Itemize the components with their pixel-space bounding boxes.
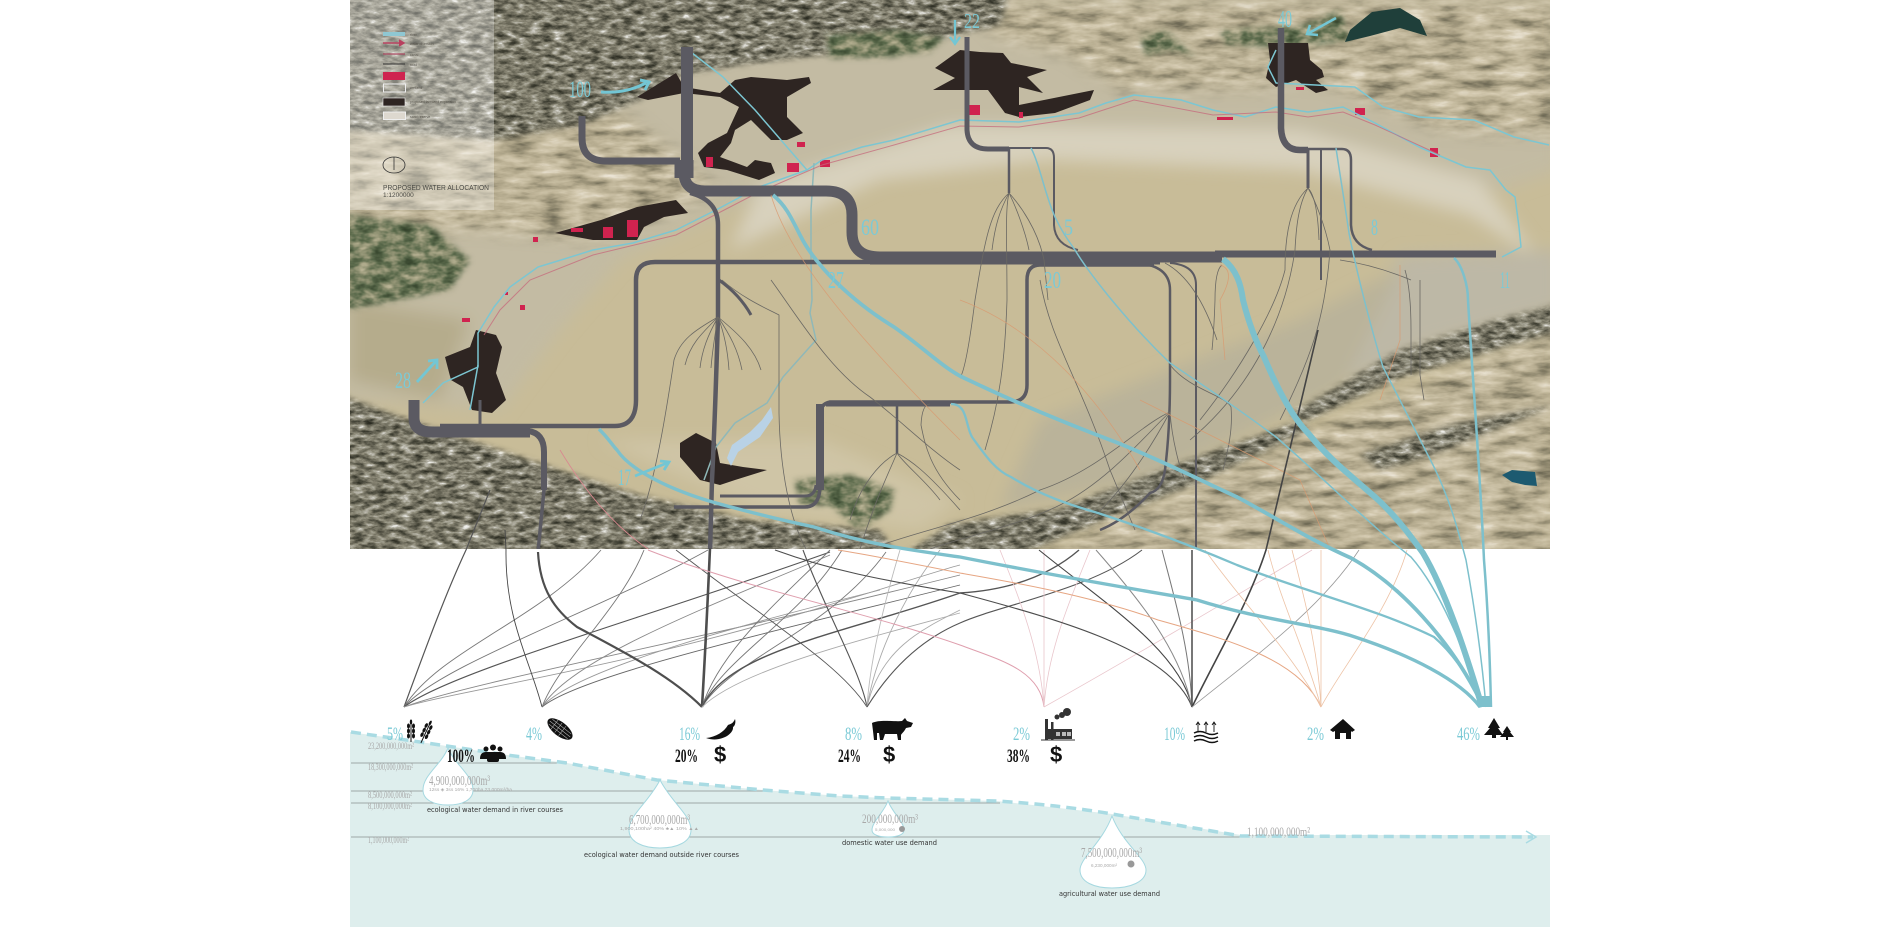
drop: domestic demand: [842, 801, 937, 847]
arrow: 100 inflow: [601, 80, 649, 92]
arrow: 40 inflow: [1307, 18, 1336, 35]
green vegetation patches: [350, 8, 1350, 530]
chili share: 16%: [679, 724, 700, 745]
chili income: [675, 742, 726, 767]
drop: outside river courses ecology: [584, 780, 739, 859]
drop: agricultural demand: 6,230,000m²: [1091, 863, 1118, 868]
orange canals: [771, 195, 1400, 549]
forest share: 46%: [1457, 724, 1480, 745]
arrow: water line end: [1526, 831, 1536, 843]
panel: satellite map: [340, 0, 1560, 552]
drop: river course ecology: ecological water demand in river courses: [427, 805, 563, 814]
inflow 40: 40: [1278, 7, 1292, 33]
canal fans: [640, 188, 1424, 549]
arrow: 28 inflow: [417, 360, 437, 382]
chili income: $: [714, 742, 726, 767]
level labels: 1,100,000,000m²: [1247, 824, 1310, 839]
dashed water line: [351, 732, 1533, 837]
level lines: [351, 763, 1241, 837]
allocation 20: 20: [1044, 268, 1061, 294]
drop: outside river courses ecology: ecological water demand outside river courses: [584, 850, 739, 859]
drop: river course ecology: [423, 748, 563, 814]
housing share: 2%: [1307, 724, 1324, 745]
inflow 100: 100: [569, 77, 591, 102]
inflow 28: 28: [395, 368, 411, 393]
drop: outside river courses ecology: 1,900,100ha² 40% ♣▲ 10% ▲▲: [620, 826, 699, 831]
terminal lake: [727, 407, 773, 466]
chili share: [679, 719, 735, 745]
drop: outside river courses ecology: 6,700,000,000m³: [629, 813, 690, 828]
arrow: 22 inflow: [950, 20, 960, 44]
drop: river course ecology: 4,900,000,000m³: [429, 774, 490, 789]
livestock share: [845, 718, 913, 745]
corn share: 4%: [526, 724, 542, 745]
rivers: [423, 50, 1549, 480]
tan ridged terrain: [350, 0, 1550, 549]
arrow: 17 inflow: [635, 461, 669, 476]
industry income: [1007, 742, 1062, 767]
legend labels: river: [410, 33, 418, 37]
water share: 10%: [1164, 724, 1185, 745]
river inflow labels and arrows: [395, 7, 1510, 490]
dark snow-capped mountains: [350, 0, 1550, 549]
legend swatches: [383, 32, 406, 120]
inflow 17: 17: [618, 465, 631, 490]
irrigation canals: [484, 100, 1440, 335]
drop: domestic demand: domestic water use demand: [842, 838, 937, 847]
sand desert base: [350, 0, 1550, 549]
flows to water conservation: [775, 330, 1359, 707]
level labels: [368, 742, 1310, 846]
allocation 27: 27: [828, 268, 844, 294]
drop: domestic demand: 200,000,000m³: [862, 811, 918, 826]
livestock income: 24%: [838, 746, 861, 767]
chili income: 20%: [675, 746, 698, 767]
flows to wheat: [404, 490, 960, 707]
industry income: 38%: [1007, 746, 1030, 767]
level labels: 8,100,000,000m²: [368, 802, 412, 812]
level labels: 23,200,000,000m²: [368, 742, 414, 752]
legend labels: [410, 33, 456, 119]
oasis farmland regions: [445, 43, 1328, 485]
forest share: [1457, 718, 1514, 745]
flows to corn: [505, 530, 960, 707]
north compass: [383, 157, 405, 173]
sector share row: [387, 708, 1514, 767]
livestock income: $: [883, 742, 895, 767]
flows to industry: [648, 550, 1312, 707]
level labels: 18,300,000,000m²: [368, 763, 413, 773]
pale northern foothills and river belt: [340, 0, 1560, 530]
industry share: [1013, 708, 1075, 745]
legend title: PROPOSED WATER ALLOCATION: [383, 185, 489, 192]
livestock income: [838, 742, 895, 767]
drop: agricultural demand: agricultural water use demand: [1059, 889, 1160, 898]
population share: 100%: [447, 746, 475, 767]
water diversion pipes: [414, 28, 1496, 552]
livestock share: 8%: [845, 724, 862, 745]
drop: domestic demand: 5,000,000: [875, 827, 896, 832]
industry income: $: [1050, 742, 1062, 767]
drop: agricultural demand: [1059, 816, 1160, 898]
flows to ecological forest: [599, 148, 1492, 707]
wheat share: 5%: [387, 724, 403, 745]
diagram: allocation flow lines: [404, 148, 1492, 707]
legend overlay: [350, 0, 494, 210]
legend labels: sand reserve: [410, 115, 430, 119]
water share: [1164, 722, 1218, 745]
industry share: 2%: [1013, 724, 1030, 745]
panel: water level profile: [350, 732, 1550, 927]
wheat share: [387, 719, 435, 745]
flows to housing: [838, 550, 1407, 707]
inflow 22: 22: [964, 9, 980, 33]
allocation 8: 8: [1371, 215, 1378, 240]
map scale: 1:1200000: [383, 192, 414, 199]
text: 11: [1500, 268, 1510, 294]
drop: agricultural demand: 7,500,000,000m³: [1081, 846, 1142, 861]
red urban areas: [462, 87, 1438, 322]
corn share: [526, 714, 576, 745]
flows to livestock: [676, 550, 1142, 707]
lakes: [1345, 8, 1537, 486]
drop: river course ecology: 12ss ◈ 3ss 16% 1,700ha 23,000m³/ha: [429, 787, 513, 792]
legend labels: proposed farmland expansion: [410, 100, 456, 104]
water body fill: [350, 732, 1550, 927]
legend labels: wetland: [410, 86, 422, 90]
flows to chili: [538, 548, 1079, 707]
legend labels: road: [410, 63, 417, 67]
legend labels: canal: [410, 53, 419, 57]
level labels: 8,500,000,000m²: [368, 791, 412, 801]
allocation 5: 5: [1064, 215, 1073, 240]
pink canal: [560, 450, 648, 549]
housing share: [1307, 719, 1355, 745]
level labels: 1,100,000,000m²: [368, 836, 409, 846]
legend labels: water diversion: [410, 42, 434, 46]
allocation 60: 60: [861, 215, 879, 240]
